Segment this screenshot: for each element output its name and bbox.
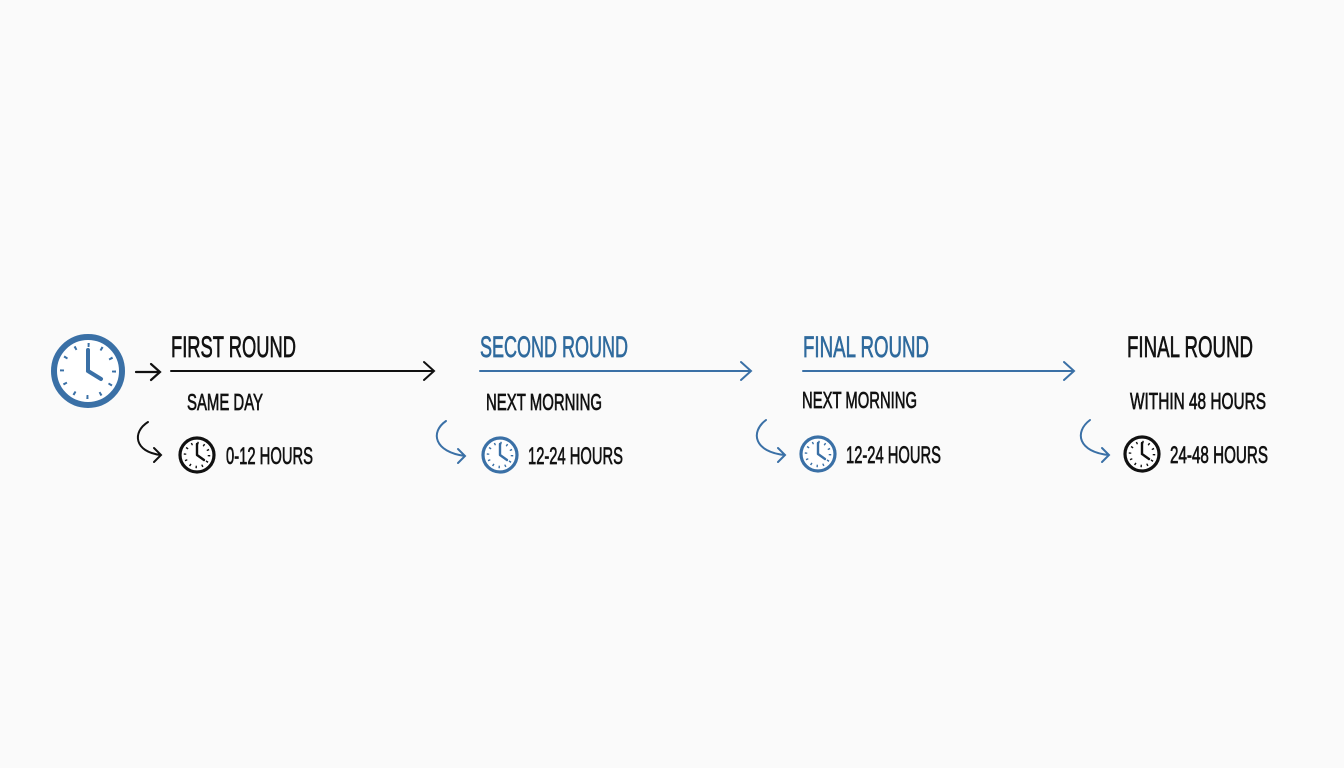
step 1: first round bbox=[138, 331, 434, 472]
icon: small clock 3 bbox=[801, 437, 835, 471]
text: 12-24 hours: 12-24 HOURS bbox=[846, 442, 941, 469]
text: within 48 hours: WITHIN 48 HOURS bbox=[1130, 388, 1266, 414]
icon: small clock 1 bbox=[180, 438, 214, 472]
arrow: start arrow bbox=[136, 364, 160, 380]
icon: small clock 4 bbox=[1125, 437, 1159, 471]
heading: second round: SECOND ROUND bbox=[480, 331, 628, 364]
arrow: curved 2 bbox=[437, 421, 465, 463]
heading: final round: FINAL ROUND bbox=[1127, 331, 1253, 364]
text: same day: SAME DAY bbox=[187, 389, 263, 415]
text: 12-24 hours: 12-24 HOURS bbox=[528, 443, 623, 470]
arrow: curved 1 bbox=[138, 422, 161, 462]
arrow: line 3 bbox=[803, 362, 1074, 380]
arrow: curved 4 bbox=[1081, 420, 1109, 462]
step 2: second round bbox=[437, 331, 751, 472]
step 3: final round (blue) bbox=[757, 331, 1074, 471]
heading: final round: FINAL ROUND bbox=[803, 331, 929, 364]
icon: large clock bbox=[54, 337, 122, 405]
text: next morning: NEXT MORNING bbox=[802, 387, 917, 413]
arrow: curved 3 bbox=[757, 420, 785, 462]
text: next morning: NEXT MORNING bbox=[486, 389, 602, 415]
icon: small clock 2 bbox=[483, 438, 517, 472]
step 4: final round (black) bbox=[1081, 331, 1268, 471]
text: 24-48 hours: 24-48 HOURS bbox=[1170, 442, 1268, 469]
heading: first round: FIRST ROUND bbox=[171, 331, 296, 364]
arrow: line 2 bbox=[480, 362, 751, 380]
arrow: line 1 bbox=[171, 362, 434, 380]
text: 0-12 hours: 0-12 HOURS bbox=[226, 443, 313, 470]
